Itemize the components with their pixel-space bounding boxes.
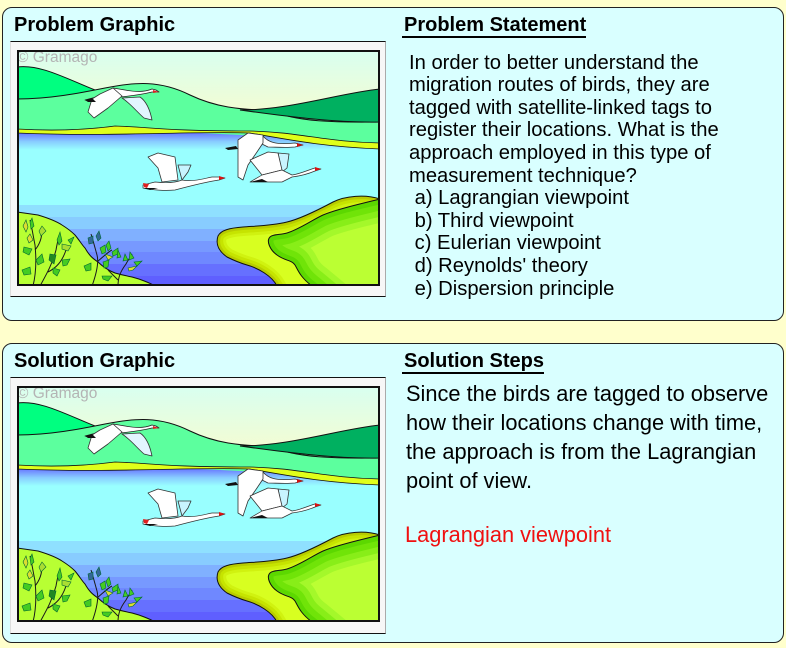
text block: problem statement — [409, 52, 719, 300]
text block: problem statement: b) Third viewpoint — [415, 210, 574, 232]
swan: lower right — [250, 488, 321, 518]
image border — [18, 387, 379, 621]
right peninsula — [210, 190, 385, 305]
panel: problem — [2, 7, 784, 321]
image frame: solution — [10, 377, 386, 634]
text block: problem statement: e) Dispersion principle — [415, 278, 614, 300]
left shore — [17, 548, 155, 622]
text block: problem statement: approach employed in this type of — [409, 142, 711, 164]
text block: solution steps: the approach is from the Lagrangian — [406, 439, 756, 464]
text block: solution steps: Since the birds are tagged to observe — [406, 380, 768, 406]
text block: problem statement: measurement technique? — [409, 165, 637, 187]
text block: solution steps — [406, 380, 768, 493]
text block: problem statement: tagged with satellite-linked tags to — [409, 97, 712, 119]
text block: solution steps: point of view. — [406, 468, 532, 493]
image frame: problem — [10, 41, 386, 297]
image border — [18, 51, 379, 285]
plants — [22, 218, 142, 286]
landscape background — [17, 50, 380, 286]
swan: lower right — [250, 152, 321, 182]
panel: solution — [2, 343, 784, 643]
illustration: swans over lake (solution) — [17, 386, 380, 622]
swan: upper right — [225, 469, 303, 516]
text block: problem statement: a) Lagrangian viewpoint — [415, 187, 629, 209]
heading: problem statement: Problem Statement — [404, 14, 586, 36]
illustration: swans over lake (problem) — [17, 50, 380, 286]
text block: problem statement: migration routes of birds, they are — [409, 74, 710, 96]
text block: problem statement: In order to better understand the — [409, 52, 699, 74]
plants — [22, 554, 142, 622]
swan: center — [143, 489, 225, 526]
heading: solution steps: Solution Steps — [404, 350, 544, 372]
answer: Lagrangian viewpoint — [405, 522, 611, 547]
swan: center — [143, 153, 225, 190]
swan: upper left — [85, 88, 159, 120]
text block: solution steps: how their locations change with time, — [406, 410, 762, 435]
landscape background — [17, 386, 380, 622]
left shore — [17, 212, 155, 286]
heading: solution graphic: Solution Graphic — [14, 350, 175, 372]
swan: upper right — [225, 133, 303, 180]
heading: problem graphic: Problem Graphic — [14, 14, 175, 36]
text block: problem statement: d) Reynolds' theory — [415, 255, 588, 277]
swan: upper left — [85, 424, 159, 456]
text block: problem statement: c) Eulerian viewpoint — [415, 232, 601, 254]
right peninsula — [210, 526, 385, 641]
text block: problem statement: register their locations. What is the — [409, 119, 719, 141]
